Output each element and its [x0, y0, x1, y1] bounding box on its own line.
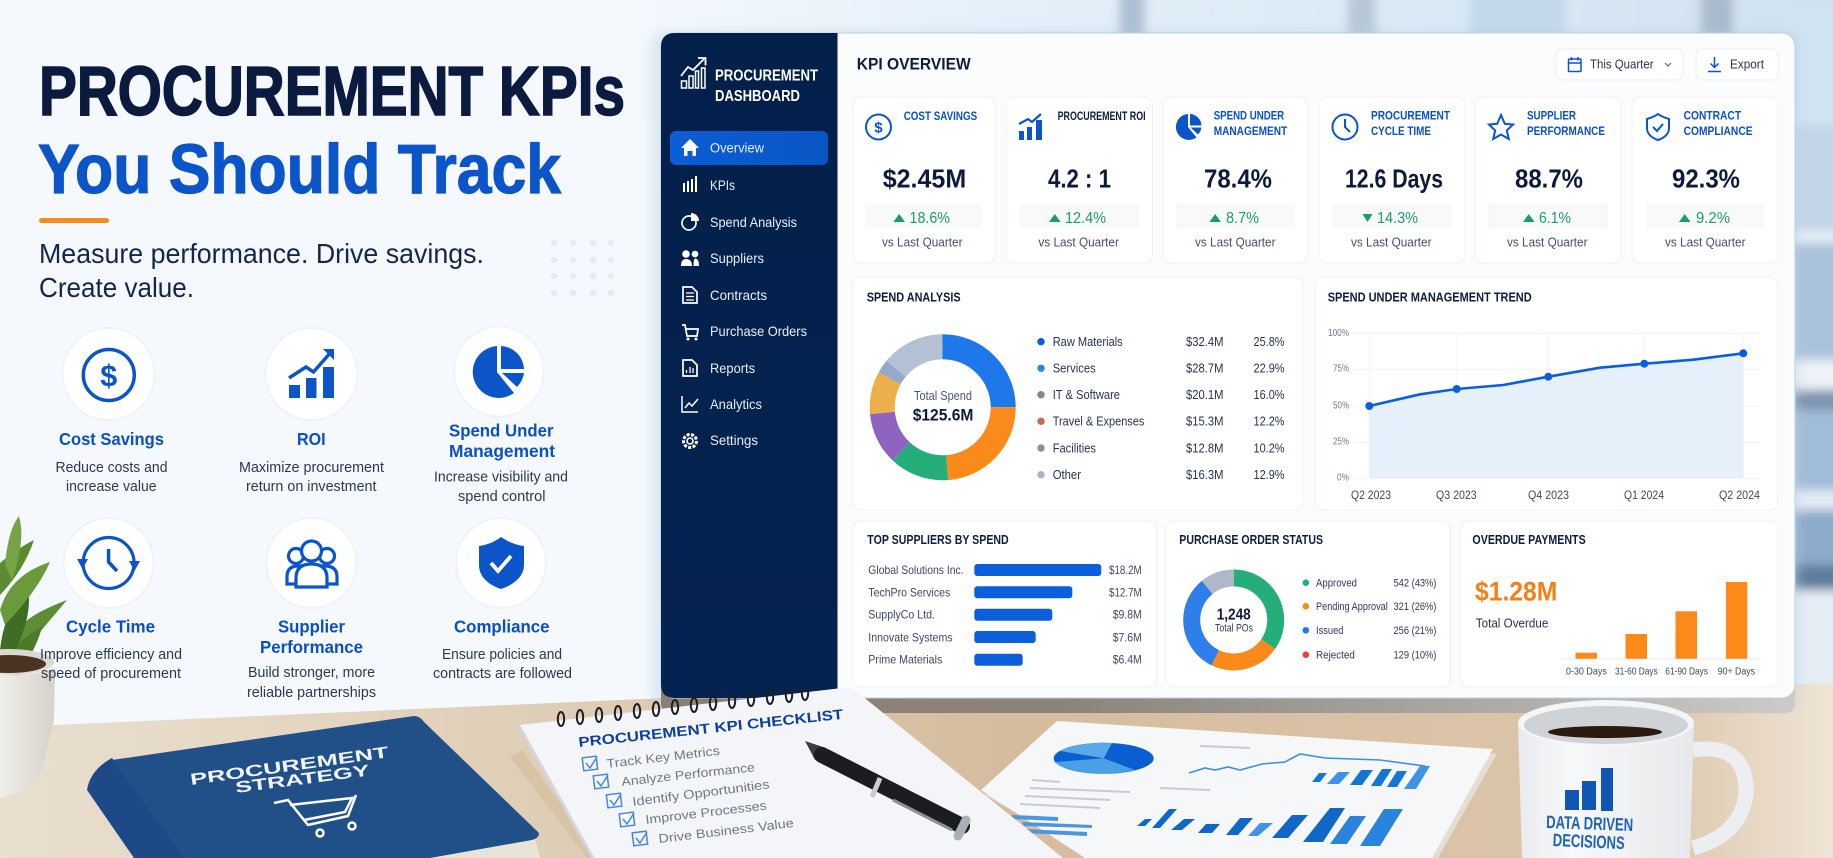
nav: suppliers: Suppliers — [710, 250, 764, 266]
PO legend: 542 (43%) — [1394, 578, 1436, 590]
panel: overdue payments: $1.28M — [1475, 577, 1557, 607]
KPI card: contract compliance: vs Last Quarter — [1665, 236, 1746, 250]
panel: overdue payments: Total Overdue — [1476, 615, 1548, 630]
overdue bar chart — [1561, 582, 1761, 677]
checklist items: Identify Opportunities — [632, 777, 770, 809]
nav: reports: Reports — [710, 360, 755, 376]
legend: 12.2% — [1254, 415, 1284, 429]
legend: $16.3M — [1186, 468, 1224, 482]
legend: 25.8% — [1254, 335, 1284, 349]
feature: ROI: ROI — [297, 429, 326, 449]
nav: contracts — [683, 287, 767, 303]
legend: $32.4M — [1186, 335, 1224, 349]
feature: cycle time: Improve efficiency and — [40, 647, 182, 663]
KPI card: contract compliance: 92.3% — [1672, 164, 1740, 194]
legend: 12.9% — [1254, 468, 1284, 482]
book: procurement strategy — [87, 716, 540, 858]
blurred office window backdrop — [640, 0, 1833, 690]
mug label: DECISIONS — [1552, 830, 1625, 853]
sidebar — [661, 33, 838, 698]
book spine — [87, 758, 185, 858]
x axis labels: Q1 2024 — [1624, 488, 1664, 502]
PO legend: 256 (21%) — [1394, 625, 1436, 637]
icon: dollar — [866, 114, 891, 140]
feature: supplier performance: Build stronger, more — [248, 665, 375, 681]
KPI card: cost savings: 18.6% — [910, 210, 950, 227]
subtitle: Create value. — [39, 272, 194, 303]
panel: top suppliers by spend: TOP SUPPLIERS BY SPEND — [867, 533, 1009, 547]
icon: pie — [1176, 114, 1202, 140]
icon: shopping cart — [274, 795, 356, 836]
mug label — [1546, 812, 1634, 853]
icon: clock — [1332, 114, 1358, 140]
feature: spend under management: spend control — [458, 489, 546, 505]
bar chart: $9.8M — [1113, 608, 1142, 622]
sidebar heading — [715, 68, 818, 105]
subtitle: Measure performance. Drive savings. — [39, 238, 484, 269]
bar chart: Global Solutions Inc. — [868, 563, 964, 577]
sidebar heading: PROCUREMENT — [715, 68, 818, 85]
KPI card: spend under management: 78.4% — [1204, 164, 1272, 194]
feature: ROI: return on investment — [246, 479, 376, 495]
KPI card: supplier performance — [1475, 97, 1621, 263]
KPI card: supplier performance: SUPPLIER — [1527, 110, 1577, 122]
KPI card: contract compliance: 9.2% — [1696, 210, 1730, 227]
legend: 16.0% — [1254, 388, 1284, 402]
monitor shadow — [650, 30, 1800, 710]
mini pie chart — [1054, 743, 1154, 774]
PO legend: 129 (10%) — [1394, 650, 1436, 662]
bar chart: $12.7M — [1109, 585, 1142, 599]
x axis labels: Q3 2023 — [1436, 488, 1477, 502]
overdue bar chart: 31-60 Days — [1615, 665, 1658, 677]
pen — [805, 741, 966, 836]
KPI card: procurement cycle time: vs Last Quarter — [1351, 236, 1432, 250]
spiral rings — [558, 686, 808, 726]
legend: $12.8M — [1186, 441, 1224, 455]
y axis labels: 0% — [1337, 471, 1349, 483]
panel: overdue payments: OVERDUE PAYMENTS — [1472, 533, 1586, 547]
icon: star — [1489, 115, 1513, 139]
panel: overdue payments — [1460, 521, 1778, 687]
overdue bar chart: 61-90 Days — [1665, 665, 1708, 677]
icon: pie chart — [473, 346, 524, 398]
coffee surface — [1548, 726, 1662, 738]
PO legend: 321 (26%) — [1394, 601, 1436, 613]
nav: analytics: Analytics — [710, 396, 762, 412]
PO legend: Rejected — [1316, 650, 1355, 662]
feature: cost savings: Cost Savings — [59, 429, 164, 449]
nav: contracts: Contracts — [710, 287, 767, 303]
KPI card: procurement cycle time: CYCLE TIME — [1371, 126, 1431, 138]
KPI card: procurement ROI: vs Last Quarter — [1038, 236, 1119, 250]
header: KPI overview: KPI OVERVIEW — [857, 54, 972, 73]
panel: spend analysis: Total Spend — [914, 389, 972, 403]
KPI card: contract compliance: CONTRACT — [1684, 110, 1741, 122]
PO legend — [1302, 578, 1436, 662]
icon: shield — [1647, 114, 1669, 140]
PO donut chart — [1192, 578, 1276, 662]
KPI card: procurement ROI: 4.2 : 1 — [1048, 164, 1111, 194]
KPI card: supplier performance: PERFORMANCE — [1527, 126, 1605, 138]
nav: settings — [684, 432, 758, 448]
feature: compliance: contracts are followed — [433, 666, 572, 682]
icon: leaves — [0, 516, 67, 690]
title — [38, 52, 625, 208]
KPI card: spend under management: SPEND UNDER — [1214, 110, 1285, 122]
report paper on desk — [981, 721, 1497, 858]
x axis labels — [1351, 488, 1760, 502]
feature: spend under management: Management — [449, 441, 555, 461]
KPI card: procurement cycle time: 12.6 Days — [1345, 164, 1443, 194]
checklist items: Improve Processes — [645, 798, 767, 827]
legend: Facilities — [1053, 441, 1096, 455]
check boxes — [582, 756, 648, 846]
nav: overview active — [670, 131, 828, 165]
feature: cycle time — [40, 518, 182, 682]
nav: KPIs — [683, 176, 735, 193]
nav: settings: Settings — [710, 432, 758, 448]
x axis labels: Q2 2023 — [1351, 488, 1391, 502]
button: export: Export — [1730, 57, 1764, 72]
legend: Services — [1053, 362, 1096, 376]
legend: 10.2% — [1254, 441, 1284, 455]
KPI card: procurement cycle time: PROCUREMENT — [1371, 110, 1450, 122]
legend: $15.3M — [1186, 415, 1224, 429]
icon: ROI chart — [1019, 114, 1042, 140]
book cover — [112, 716, 539, 858]
feature: cost savings: increase value — [66, 479, 157, 495]
icon: shield check — [479, 537, 524, 589]
bar chart: $6.4M — [1113, 653, 1142, 667]
feature: ROI — [239, 328, 384, 495]
orange accent bar — [39, 218, 109, 223]
y axis labels: 100% — [1328, 327, 1349, 339]
feature: supplier performance: Supplier — [278, 617, 345, 637]
legend: IT & Software — [1053, 388, 1120, 402]
nav: suppliers — [681, 250, 764, 266]
feature: supplier performance: Performance — [260, 637, 363, 657]
KPI card: procurement cycle time — [1319, 97, 1465, 263]
panel: purchase order status: Total POs — [1215, 623, 1253, 635]
KPI card: supplier performance: vs Last Quarter — [1507, 236, 1588, 250]
desk surface — [0, 683, 1833, 858]
feature: supplier performance: reliable partnerships — [247, 685, 376, 701]
KPI card: cost savings: COST SAVINGS — [904, 111, 977, 123]
PO legend: Issued — [1316, 625, 1344, 637]
feature: spend under management: Spend Under — [449, 421, 554, 441]
legend: Raw Materials — [1053, 335, 1123, 349]
nav: reports — [683, 360, 755, 376]
dashboard monitor — [650, 30, 1800, 713]
book: procurement strategy: PROCUREMENT — [189, 744, 390, 789]
bar chart — [868, 563, 1142, 667]
mini line chart — [1189, 754, 1425, 773]
icon: clock with arrows — [77, 538, 140, 588]
panel: purchase order status: PURCHASE ORDER STATUS — [1179, 533, 1323, 547]
book: procurement strategy: STRATEGY — [234, 762, 371, 797]
legend: $28.7M — [1186, 362, 1224, 376]
monitor bezel — [661, 680, 1795, 713]
x axis labels: Q2 2024 — [1719, 488, 1760, 502]
KPI card: procurement ROI — [1006, 97, 1152, 263]
bar chart: TechPro Services — [868, 585, 950, 599]
icon: growth chart — [289, 349, 334, 398]
nav: analytics — [682, 396, 762, 412]
KPI card: spend under management: vs Last Quarter — [1195, 236, 1276, 250]
KPI card: cost savings: $2.45M — [883, 164, 966, 194]
feature: compliance: Ensure policies and — [442, 647, 562, 663]
checklist items: Analyze Performance — [621, 760, 756, 789]
KPI card: supplier performance: 6.1% — [1539, 210, 1571, 227]
sidebar heading: DASHBOARD — [715, 88, 800, 105]
panel: spend analysis: $125.6M — [913, 406, 973, 425]
mug logo chart — [1565, 768, 1613, 811]
feature: cost savings: Reduce costs and — [56, 460, 168, 476]
mug label: DATA DRIVEN — [1546, 812, 1634, 835]
x axis labels: Q4 2023 — [1528, 488, 1569, 502]
notebook: procurement KPI checklist — [510, 686, 1063, 858]
y axis labels: 75% — [1333, 363, 1349, 375]
panel: purchase order status — [1166, 521, 1451, 687]
subtitle — [39, 238, 484, 303]
y axis labels: 25% — [1333, 436, 1349, 448]
KPI card: spend under management: 8.7% — [1226, 210, 1259, 227]
title: PROCUREMENT KPIs — [39, 52, 625, 130]
plant in pot — [0, 516, 67, 798]
KPI card: cost savings: vs Last Quarter — [882, 236, 962, 250]
mug body — [1518, 723, 1694, 858]
feature: supplier performance — [247, 518, 376, 701]
overdue bar chart: 90+ Days — [1718, 665, 1755, 677]
KPI card: spend under management — [1163, 97, 1308, 263]
checklist items: Track Key Metrics — [606, 744, 721, 771]
KPI card: supplier performance: 88.7% — [1515, 164, 1583, 194]
mini bars lower — [1137, 808, 1403, 846]
mini horizontal bars — [1012, 815, 1092, 836]
PO legend: Approved — [1316, 578, 1357, 590]
legend: Travel & Expenses — [1053, 415, 1144, 429]
icon: dollar: $ — [874, 120, 883, 136]
panel: spend analysis: SPEND ANALYSIS — [867, 291, 961, 305]
button: this quarter — [1556, 49, 1683, 80]
nav: purchase orders: Purchase Orders — [710, 323, 807, 339]
KPI card: procurement ROI: PROCUREMENT ROI — [1058, 111, 1146, 123]
PO legend: Pending Approval — [1316, 601, 1388, 613]
icon: dashboard logo — [681, 58, 706, 88]
panel: spend under management trend — [1315, 277, 1778, 510]
bar chart: $18.2M — [1109, 563, 1142, 577]
panel: top suppliers by spend — [853, 521, 1157, 687]
bar chart: Prime Materials — [868, 653, 942, 667]
legend — [1037, 335, 1284, 482]
feature: cycle time: Cycle Time — [66, 617, 155, 637]
main panel — [661, 33, 1795, 698]
feature: ROI: Maximize procurement — [239, 460, 384, 476]
notebook: procurement KPI checklist: PROCUREMENT KPI CHECKLIST — [578, 706, 844, 750]
mini text lines — [1020, 746, 1250, 808]
nav: purchase orders — [682, 323, 807, 340]
panel: purchase order status: 1,248 — [1217, 606, 1251, 623]
legend: Other — [1053, 468, 1081, 482]
panel: spend analysis — [853, 277, 1303, 510]
feature: compliance: Compliance — [454, 617, 550, 637]
bar chart: $7.6M — [1113, 630, 1142, 644]
decorative dot grid — [551, 240, 614, 296]
KPI card: procurement ROI: 12.4% — [1065, 210, 1106, 227]
nav: overview active: Overview — [710, 140, 765, 156]
nav: KPIs: KPIs — [710, 177, 735, 193]
nav: spend analysis — [682, 213, 797, 230]
mug handle — [1693, 749, 1746, 848]
KPI card: contract compliance — [1632, 97, 1778, 263]
icon: dollar coin — [83, 350, 134, 400]
bar chart: SupplyCo Ltd. — [868, 608, 935, 622]
feature: cycle time: speed of procurement — [41, 666, 181, 682]
button: this quarter: This Quarter — [1590, 57, 1654, 72]
plant pot — [0, 649, 55, 798]
feature: cost savings — [56, 328, 168, 495]
KPI card: spend under management: MANAGEMENT — [1214, 126, 1287, 138]
feature: spend under management: Increase visibility and — [434, 470, 568, 486]
button: export — [1696, 49, 1778, 80]
nav: spend analysis: Spend Analysis — [710, 214, 797, 230]
legend: 22.9% — [1254, 362, 1284, 376]
icon: dollar coin: $ — [100, 358, 117, 393]
y axis labels — [1328, 327, 1349, 483]
feature: compliance — [433, 518, 572, 682]
feature: spend under management — [434, 326, 568, 505]
title: You Should Track — [38, 130, 561, 208]
y axis labels: 50% — [1333, 399, 1349, 411]
checklist items: Drive Business Value — [658, 816, 794, 846]
panel: spend under management trend: SPEND UNDER MANAGEMENT TREND — [1328, 291, 1532, 305]
KPI card: contract compliance: COMPLIANCE — [1684, 126, 1753, 138]
icon: people — [287, 541, 337, 587]
mini bars upper — [1312, 766, 1430, 789]
KPI card: procurement cycle time: 14.3% — [1377, 210, 1418, 227]
donut chart — [882, 347, 1003, 468]
KPI card: cost savings — [853, 97, 996, 263]
overdue bar chart: 0-30 Days — [1566, 665, 1607, 677]
legend: $20.1M — [1186, 388, 1224, 402]
area line chart — [1353, 333, 1760, 478]
checklist items — [606, 744, 794, 846]
coffee mug — [1518, 700, 1746, 858]
bar chart: Innovate Systems — [868, 630, 953, 644]
